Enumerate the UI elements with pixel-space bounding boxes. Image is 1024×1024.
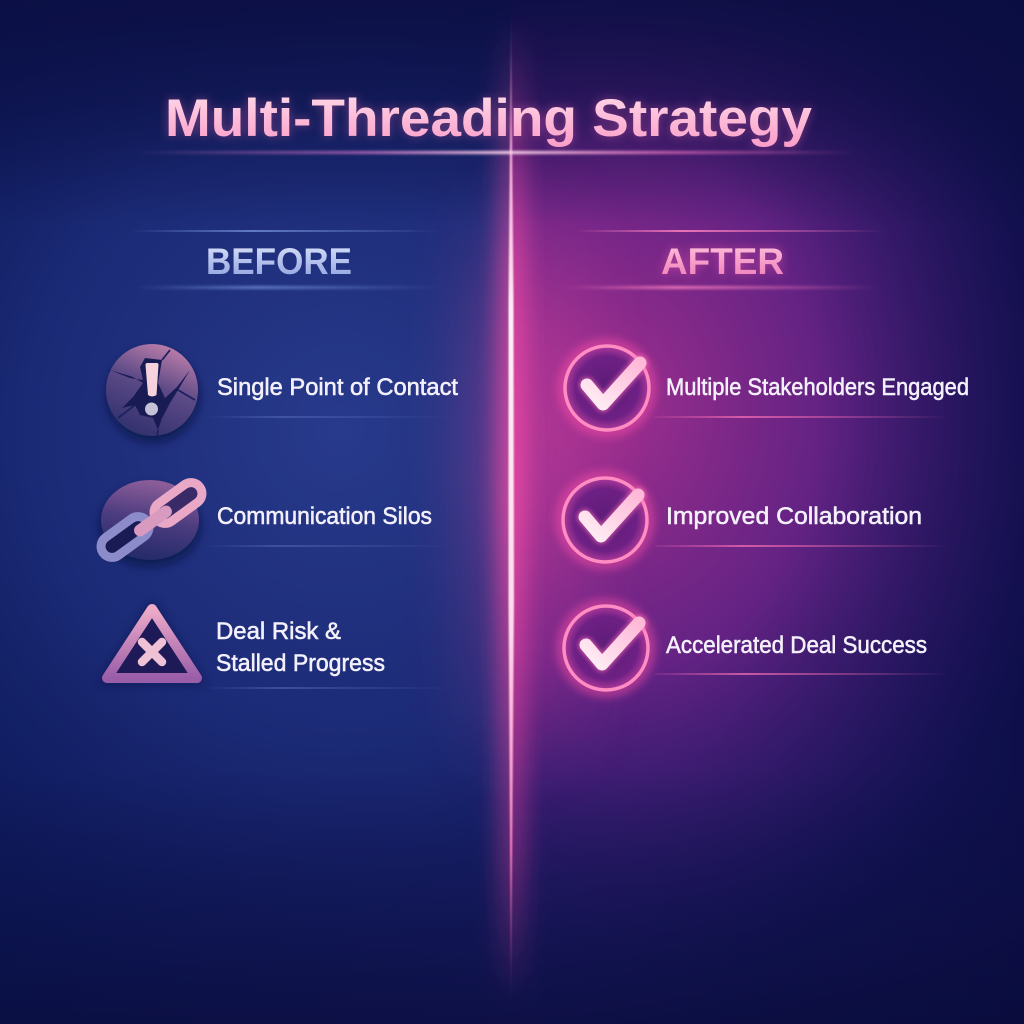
item: improved collaboration <box>561 476 950 564</box>
label: Deal Risk & <box>216 618 341 645</box>
item: single point of contact <box>106 344 458 442</box>
heading: after: AFTER <box>661 241 784 282</box>
title: Multi-Threading Strategy <box>165 89 813 148</box>
label: Accelerated Deal Success <box>666 632 927 659</box>
heading: before: BEFORE <box>206 241 352 282</box>
item: accelerated deal success <box>562 604 950 692</box>
title: Multi-Threading Strategy <box>165 89 813 148</box>
panel: before <box>97 230 458 689</box>
icon: warning triangle <box>106 607 198 680</box>
icon: check ring <box>561 476 649 564</box>
heading: before <box>130 230 440 289</box>
heading: after: AFTER <box>661 241 784 282</box>
label: Multiple Stakeholders Engaged <box>666 374 969 401</box>
label: Stalled Progress <box>216 650 385 677</box>
label <box>216 618 385 677</box>
icon: check ring <box>563 344 651 432</box>
label: Communication Silos <box>217 503 432 530</box>
item: communication silos <box>97 478 455 566</box>
glowing centre divider <box>470 15 580 1005</box>
heading: after <box>565 230 885 289</box>
item: deal risk <box>106 607 455 689</box>
panel: after <box>561 230 969 692</box>
icon: cracked alert disc <box>106 344 199 442</box>
item: multiple stakeholders <box>563 344 969 432</box>
label: Improved Collaboration <box>666 503 922 530</box>
label: Single Point of Contact <box>217 374 458 401</box>
icon: check ring <box>562 604 650 692</box>
icon: chain link on disc <box>97 478 206 566</box>
